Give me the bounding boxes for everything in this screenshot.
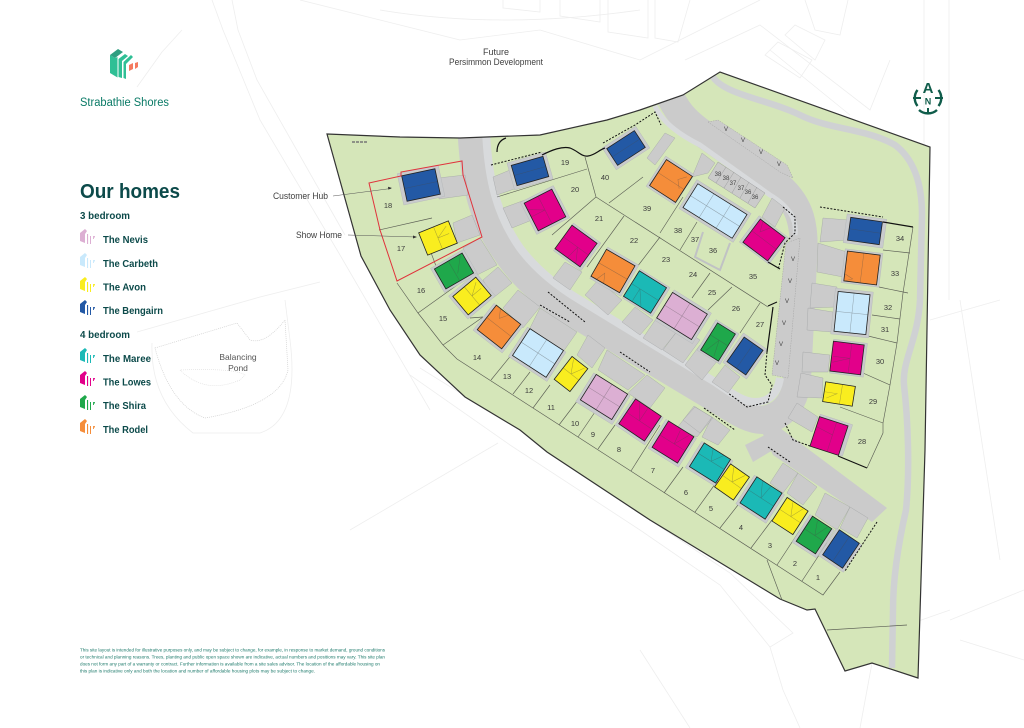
- plot numbers: 8: [617, 445, 621, 454]
- label: balancing pond: Balancing: [219, 352, 257, 362]
- house: plot 15, The Avon: [449, 273, 495, 319]
- visitor parking strips: V: [782, 321, 786, 327]
- house: plot 5, The Avon: [715, 464, 749, 500]
- house: plot 19, The Bengairn: [507, 152, 553, 190]
- plot numbers: 14: [473, 353, 481, 362]
- plot numbers: 27: [756, 320, 764, 329]
- visitor parking strips: V: [788, 279, 792, 285]
- house: plot 25 and 24, The Nevis: [655, 290, 711, 344]
- house: plot 40, The Bengairn: [602, 126, 650, 170]
- plot numbers: 26: [732, 304, 740, 313]
- visitor parking strips: V: [741, 138, 745, 144]
- plot numbers: 20: [571, 185, 579, 194]
- disclaimer text: does not form any part of a warranty or contract. Further information is available from a site sales advisor. The location of the affordable housing on: [80, 662, 380, 666]
- plot numbers: 40: [601, 173, 609, 182]
- legend: The Nevis: The Nevis: [103, 234, 148, 246]
- plot numbers: 33: [891, 269, 899, 278]
- disclaimer text: or technical and planning reasons. Trees, planting and public open space shown are indicative, actual numbers and positions may vary. This site plan: [80, 654, 385, 660]
- parking court plots 36 to 38: 37: [730, 181, 737, 187]
- legend: The Lowes: [80, 371, 151, 388]
- house: plot 30, The Lowes: [830, 339, 867, 377]
- plot numbers: 38: [674, 226, 682, 235]
- plot numbers: 18: [384, 201, 392, 210]
- brand name: Strabathie Shores: [80, 97, 169, 109]
- house: plot 4, The Maree: [736, 475, 785, 523]
- label: persimmon development: Persimmon Development: [449, 57, 543, 67]
- legend: The Avon: The Avon: [103, 282, 146, 294]
- plot numbers: 23: [662, 255, 670, 264]
- house: plot 2, The Shira: [792, 515, 834, 558]
- house: plot 6, The Maree: [685, 441, 733, 487]
- callout: show home: [296, 230, 417, 240]
- callout: customer hub: [273, 187, 392, 201]
- plot numbers: 15: [439, 314, 447, 323]
- house: plots 38 and 37, The Carbeth: [679, 180, 751, 242]
- plot numbers: 7: [651, 466, 655, 475]
- disclaimer text: This site layout is intended for illustrative purposes only, and may be subject to change, for example, in response to market demand, ground conditions: [80, 648, 386, 652]
- plot numbers: 2: [793, 559, 797, 568]
- site boundary outline: [327, 72, 930, 678]
- house: plot 23, The Maree: [622, 269, 670, 316]
- house: plot 20, The Lowes: [520, 186, 570, 234]
- house: plots 10 and 9, The Nevis: [576, 373, 630, 425]
- legend: The Shira: [80, 395, 146, 412]
- legend: The Bengairn: [80, 300, 163, 317]
- house: plots 13 and 12, The Carbeth: [508, 327, 566, 381]
- legend: The Bengairn: The Bengairn: [103, 305, 163, 317]
- legend: The Maree: [80, 348, 151, 365]
- plot numbers: 12: [525, 386, 533, 395]
- disclaimer text: this plan is indicative only and both the location and number of affordable housing plots may be subject to change.: [80, 668, 315, 674]
- parking court plots 36 to 38: 36: [745, 190, 752, 196]
- icon: north compass: A: [923, 80, 934, 97]
- callout: show home: Show Home: [296, 230, 342, 240]
- visitor parking strips: V: [724, 127, 728, 133]
- parking court plots 36 to 38: 38: [715, 172, 722, 178]
- house: plot 1, The Bengairn: [818, 528, 862, 572]
- parking court plots 36 to 38: 37: [738, 186, 745, 192]
- legend: The Avon: [80, 277, 146, 294]
- legend: The Shira: The Shira: [103, 400, 146, 412]
- plot numbers: 31: [881, 325, 889, 334]
- plot numbers: 28: [858, 437, 866, 446]
- house: plot 39, The Rodel: [646, 156, 694, 205]
- plot numbers: 10: [571, 419, 579, 428]
- disclaimer text: [80, 648, 386, 674]
- driveways: [438, 133, 868, 538]
- plot numbers: 24: [689, 270, 697, 279]
- house: plot 11, The Avon: [554, 356, 588, 392]
- red line: customer hub and show home plots: [369, 161, 482, 281]
- plot numbers: 13: [503, 372, 511, 381]
- house: plot 22, The Rodel: [590, 247, 639, 296]
- sub-heading: 3 bedroom: 3 bedroom: [80, 211, 130, 222]
- visitor parking strips: V: [779, 342, 783, 348]
- house: plot 14, The Rodel: [473, 303, 523, 353]
- plot numbers: 4: [739, 523, 743, 532]
- plot numbers: 25: [708, 288, 716, 297]
- house: plot 26, The Shira: [697, 320, 739, 364]
- house: plot 7, The Lowes: [648, 419, 696, 467]
- icon: north compass: [913, 80, 943, 114]
- house: plot 27, The Bengairn: [723, 333, 767, 379]
- house: plot 35, The Lowes: [739, 216, 789, 264]
- house: plot 21, The Lowes: [553, 223, 601, 271]
- plot numbers: 17: [397, 244, 405, 253]
- visitor parking strips: V: [785, 299, 789, 305]
- house: plots 32 and 31, The Carbeth: [831, 288, 873, 338]
- plot numbers: 22: [630, 236, 638, 245]
- small site marker: [352, 141, 368, 143]
- house: plot 29, The Avon: [823, 382, 855, 406]
- heading: our homes: Our homes: [80, 181, 180, 203]
- house: plot 16, The Shira: [431, 249, 477, 293]
- parking court plots 36 to 38: [708, 162, 765, 208]
- label: future development: Future: [483, 47, 509, 57]
- plot numbers: 9: [591, 430, 595, 439]
- plot numbers: 6: [684, 488, 688, 497]
- legend: The Nevis: [80, 229, 148, 246]
- visitor parking strips: [708, 120, 800, 378]
- plot numbers: [384, 158, 904, 582]
- plot numbers: 35: [749, 272, 757, 281]
- house: plot 28, The Lowes: [810, 414, 853, 457]
- roads and footpaths: [471, 77, 922, 668]
- plot numbers: 21: [595, 214, 603, 223]
- label: balancing pond: Pond: [228, 363, 248, 373]
- callout: customer hub: Customer Hub: [273, 191, 328, 201]
- legend: The Maree: The Maree: [103, 353, 151, 365]
- plot numbers: 19: [561, 158, 569, 167]
- house: plot 3, The Avon: [772, 497, 808, 535]
- plot numbers: 32: [884, 303, 892, 312]
- legend: The Carbeth: [80, 253, 158, 270]
- house: plot 8, The Lowes: [615, 397, 663, 445]
- plot boundary lines: [379, 157, 913, 630]
- site boundary with green land: [327, 72, 930, 678]
- legend: The Rodel: The Rodel: [103, 424, 148, 436]
- house: plot 18, The Bengairn: [397, 165, 445, 205]
- plot numbers: 30: [876, 357, 884, 366]
- plot numbers: 37: [691, 235, 699, 244]
- logo: [110, 49, 138, 79]
- legend: The Carbeth: The Carbeth: [103, 258, 158, 270]
- house: plot 17, The Avon: [419, 221, 457, 255]
- house: plot 34, The Bengairn: [843, 214, 887, 248]
- plot numbers: 3: [768, 541, 772, 550]
- label: balancing pond: [219, 352, 257, 373]
- plot numbers: 29: [869, 397, 877, 406]
- plot 36 garden wall: [695, 232, 730, 270]
- parking court plots 36 to 38: 38: [723, 176, 730, 182]
- legend: The Rodel: [80, 419, 148, 436]
- icon: north compass: N: [925, 96, 931, 106]
- parking court plots 36 to 38: 36: [752, 195, 759, 201]
- plot numbers: 1: [816, 573, 820, 582]
- plot numbers: 16: [417, 286, 425, 295]
- plot numbers: 34: [896, 234, 904, 243]
- plot numbers: 39: [643, 204, 651, 213]
- visitor parking strips: V: [791, 257, 795, 263]
- visitor parking strips: V: [759, 150, 763, 156]
- visitor parking strips: V: [775, 361, 779, 367]
- heavy and dashed boundary treatment: [491, 112, 913, 571]
- legend: The Lowes: The Lowes: [103, 376, 151, 388]
- sub-heading: 4 bedroom: 4 bedroom: [80, 330, 130, 341]
- house: plot 33, The Rodel: [841, 249, 883, 287]
- plot numbers: 36: [709, 246, 717, 255]
- visitor parking strips: V: [777, 162, 781, 168]
- plot numbers: 5: [709, 504, 713, 513]
- plot numbers: 11: [547, 403, 555, 412]
